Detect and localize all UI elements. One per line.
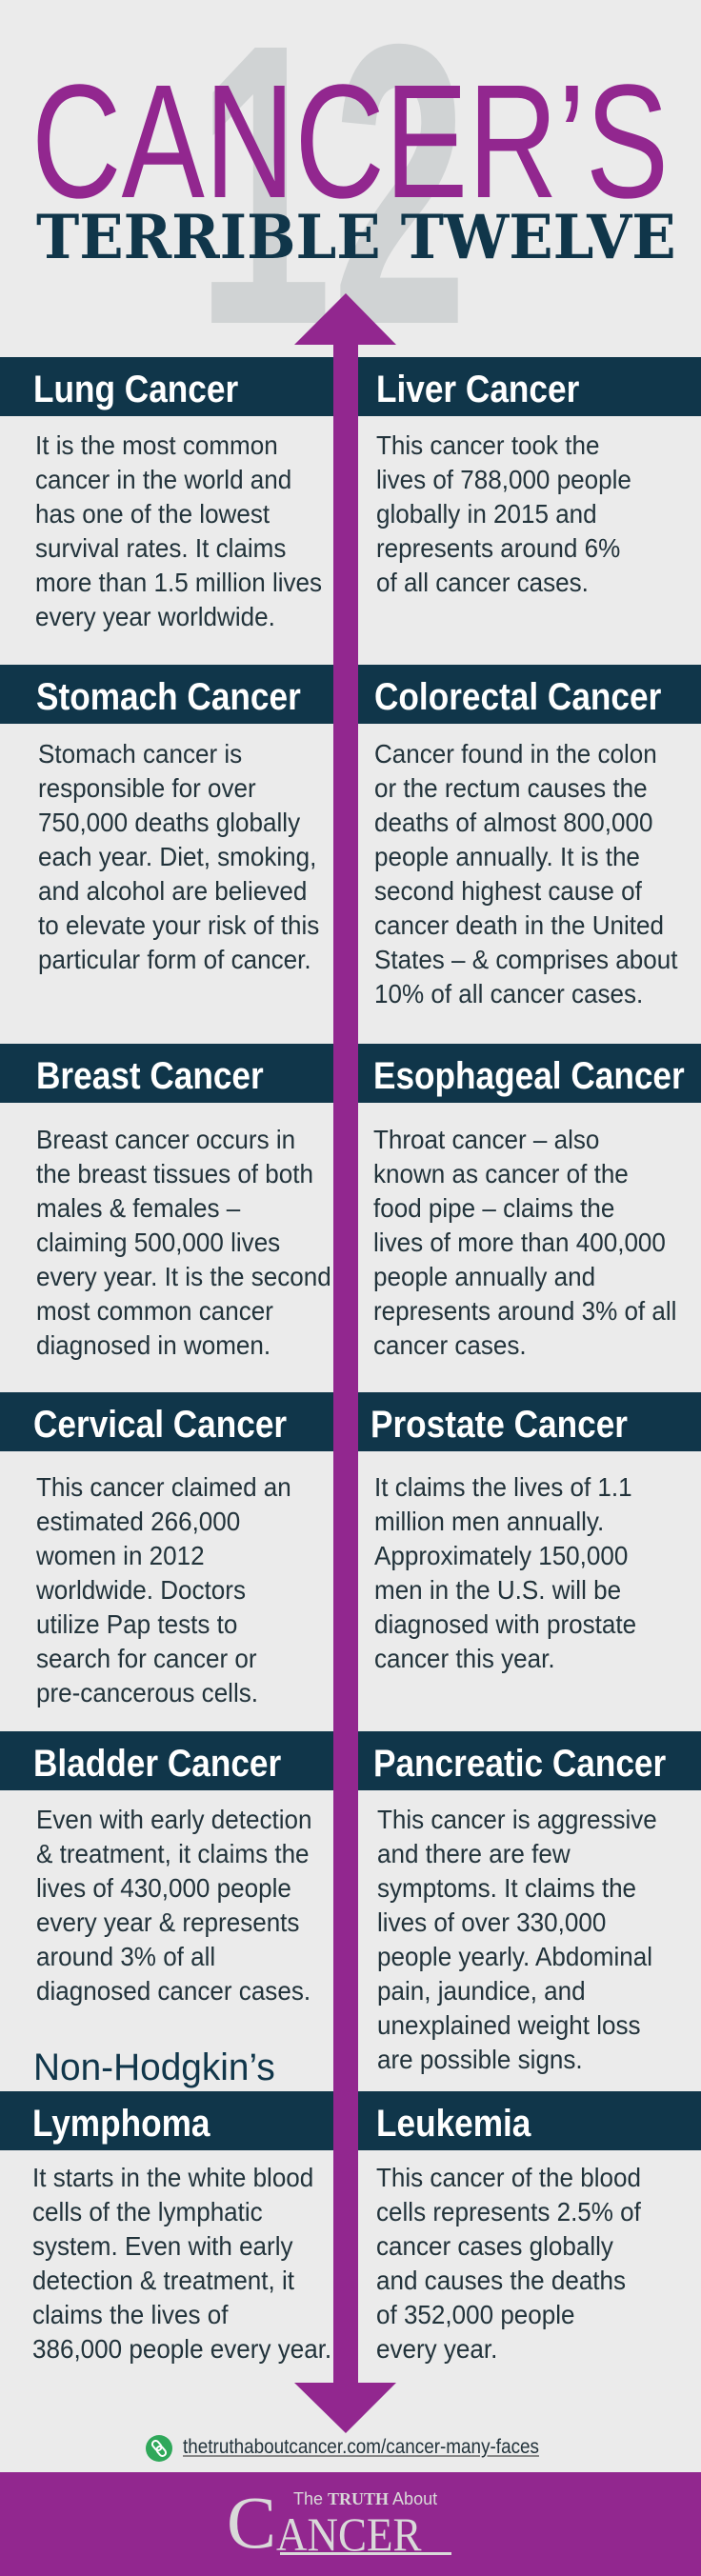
- text: breast cancer: the breast tissues of both: [36, 1159, 313, 1188]
- text: breast cancer: claiming 500,000 lives: [36, 1228, 280, 1257]
- text: lung cancer: every year worldwide.: [35, 602, 275, 631]
- text: esophageal cancer: cancer cases.: [373, 1330, 527, 1360]
- logo: The Truth About Cancer: C: [227, 2481, 276, 2564]
- text: stomach cancer: to elevate your risk of this: [38, 910, 319, 940]
- text: colorectal cancer: deaths of almost 800,000: [374, 808, 652, 837]
- text: breast cancer: males & females –: [36, 1193, 240, 1223]
- text: esophageal cancer: [373, 1125, 676, 1360]
- text: colorectal cancer: States – & comprises about: [374, 945, 677, 974]
- title: CANCER'S: CANCER’S: [31, 51, 669, 232]
- text: pancreatic cancer: unexplained weight loss: [377, 2010, 641, 2040]
- text: stomach cancer: and alcohol are believed: [38, 876, 307, 906]
- text: bladder cancer: around 3% of all: [36, 1942, 215, 1971]
- text: colorectal cancer: [374, 739, 678, 1008]
- text: prostate cancer: Approximately 150,000: [374, 1541, 628, 1570]
- text: bladder cancer: & treatment, it claims the: [36, 1839, 310, 1868]
- text: esophageal cancer: represents around 3% of all: [373, 1296, 676, 1326]
- text: pancreatic cancer: lives of over 330,000: [377, 1907, 606, 1937]
- text: leukemia: [376, 2163, 641, 2364]
- text: leukemia: every year.: [376, 2334, 497, 2364]
- heading: Esophageal Cancer: Esophageal Cancer: [373, 1055, 685, 1097]
- text: breast cancer: every year. It is the second: [36, 1262, 331, 1291]
- text: liver cancer: globally in 2015 and: [376, 499, 597, 529]
- text: esophageal cancer: known as cancer of the: [373, 1159, 629, 1188]
- text: colorectal cancer: second highest cause of: [374, 876, 642, 906]
- text: pancreatic cancer: people yearly. Abdominal: [377, 1942, 652, 1971]
- heading: Pancreatic Cancer: Pancreatic Cancer: [373, 1743, 666, 1785]
- text: prostate cancer: It claims the lives of 1.1: [374, 1472, 632, 1502]
- heading: Breast Cancer: Breast Cancer: [36, 1055, 264, 1097]
- heading: Lung Cancer: Lung Cancer: [33, 369, 238, 410]
- text: colorectal cancer: Cancer found in the colon: [374, 739, 657, 769]
- text: prostate cancer: men in the U.S. will be: [374, 1575, 621, 1605]
- text: prostate cancer: cancer this year.: [374, 1644, 555, 1673]
- text: lung cancer: more than 1.5 million lives: [35, 568, 322, 597]
- icon: link: [146, 2435, 172, 2462]
- text: esophageal cancer: lives of more than 400,000: [373, 1228, 666, 1257]
- text: breast cancer: most common cancer: [36, 1296, 273, 1326]
- text: esophageal cancer: Throat cancer – also: [373, 1125, 599, 1154]
- text: lymphoma: cells of the lymphatic: [32, 2197, 263, 2227]
- text: lung cancer: cancer in the world and: [35, 465, 291, 494]
- link text: thetruthaboutcancer.com/cancer-many-faces: [183, 2436, 539, 2458]
- text: bladder cancer: every year & represents: [36, 1907, 299, 1937]
- text: stomach cancer: particular form of cancer.: [38, 945, 311, 974]
- text: stomach cancer: responsible for over: [38, 773, 256, 803]
- logo: The Truth About Cancer: ANCER: [276, 2507, 422, 2561]
- text: leukemia: and causes the deaths: [376, 2266, 626, 2295]
- text: stomach cancer: [38, 739, 319, 974]
- text: cervical cancer: search for cancer or: [36, 1644, 257, 1673]
- text: liver cancer: This cancer took the: [376, 430, 599, 460]
- text: liver cancer: of all cancer cases.: [376, 568, 589, 597]
- text: pancreatic cancer: [377, 1805, 657, 2074]
- text: prostate cancer: million men annually.: [374, 1507, 604, 1536]
- text: prostate cancer: diagnosed with prostate: [374, 1609, 636, 1639]
- text: lymphoma: claims the lives of: [32, 2300, 229, 2329]
- text: lung cancer: survival rates. It claims: [35, 533, 286, 563]
- text: lymphoma: system. Even with early: [32, 2231, 293, 2261]
- text: leukemia: This cancer of the blood: [376, 2163, 641, 2192]
- text: liver cancer: lives of 788,000 people: [376, 465, 631, 494]
- text: colorectal cancer: cancer death in the United: [374, 910, 664, 940]
- text: esophageal cancer: people annually and: [373, 1262, 595, 1291]
- text: colorectal cancer: people annually. It is the: [374, 842, 640, 871]
- text: liver cancer: represents around 6%: [376, 533, 620, 563]
- text: lymphoma: detection & treatment, it: [32, 2266, 294, 2295]
- heading prefix: Non-Hodgkin's: Non-Hodgkin’s: [33, 2047, 275, 2088]
- heading: Cervical Cancer: Cervical Cancer: [33, 1404, 287, 1446]
- text: prostate cancer: [374, 1472, 636, 1673]
- text: stomach cancer: Stomach cancer is: [38, 739, 242, 769]
- text: cervical cancer: estimated 266,000: [36, 1507, 240, 1536]
- logo: The Truth About Cancer: [227, 2481, 451, 2564]
- heading: Stomach Cancer: Stomach Cancer: [36, 676, 301, 718]
- header band row 4: [0, 1392, 701, 1451]
- text: pancreatic cancer: pain, jaundice, and: [377, 1976, 586, 2006]
- text: lymphoma: 386,000 people every year.: [32, 2334, 331, 2364]
- text: pancreatic cancer: symptoms. It claims the: [377, 1873, 636, 1903]
- text: breast cancer: Breast cancer occurs in: [36, 1125, 295, 1154]
- text: stomach cancer: 750,000 deaths globally: [38, 808, 300, 837]
- text: pancreatic cancer: and there are few: [377, 1839, 571, 1868]
- text: lymphoma: It starts in the white blood: [32, 2163, 313, 2192]
- text: cervical cancer: [36, 1472, 291, 1707]
- heading: Lymphoma: Lymphoma: [32, 2103, 210, 2145]
- heading: Colorectal Cancer: Colorectal Cancer: [374, 676, 661, 718]
- text: breast cancer: [36, 1125, 331, 1360]
- text: cervical cancer: worldwide. Doctors: [36, 1575, 246, 1605]
- text: breast cancer: diagnosed in women.: [36, 1330, 270, 1360]
- text: leukemia: of 352,000 people: [376, 2300, 575, 2329]
- text: cervical cancer: pre-cancerous cells.: [36, 1678, 258, 1707]
- text: esophageal cancer: food pipe – claims the: [373, 1193, 614, 1223]
- text: pancreatic cancer: are possible signs.: [377, 2045, 583, 2074]
- text: cervical cancer: This cancer claimed an: [36, 1472, 291, 1502]
- header band row 5: [0, 1731, 701, 1790]
- text: leukemia: cancer cases globally: [376, 2231, 613, 2261]
- text: lymphoma: [32, 2163, 331, 2364]
- header band row 1: [0, 357, 701, 416]
- text: cervical cancer: utilize Pap tests to: [36, 1609, 237, 1639]
- heading: Prostate Cancer: Prostate Cancer: [371, 1404, 628, 1446]
- footer band: [0, 2472, 701, 2576]
- heading: Liver Cancer: Liver Cancer: [376, 369, 579, 410]
- text: bladder cancer: [36, 1805, 311, 2006]
- text: bladder cancer: diagnosed cancer cases.: [36, 1976, 310, 2006]
- text: lung cancer: [35, 430, 322, 631]
- header band row 3: [0, 1044, 701, 1103]
- subtitle: TERRIBLE TWELVE: TERRIBLE TWELVE: [36, 202, 676, 273]
- text: colorectal cancer: 10% of all cancer cases.: [374, 979, 643, 1008]
- text: lung cancer: has one of the lowest: [35, 499, 270, 529]
- link with icon: [146, 2435, 539, 2462]
- text: liver cancer: [376, 430, 631, 597]
- text: cervical cancer: women in 2012: [36, 1541, 205, 1570]
- heading: Bladder Cancer: Bladder Cancer: [33, 1743, 281, 1785]
- text: stomach cancer: each year. Diet, smoking,: [38, 842, 316, 871]
- text: leukemia: cells represents 2.5% of: [376, 2197, 641, 2227]
- text: pancreatic cancer: This cancer is aggressive: [377, 1805, 657, 1834]
- text: lung cancer: It is the most common: [35, 430, 278, 460]
- header band row 6: [0, 2091, 701, 2150]
- text: colorectal cancer: or the rectum causes the: [374, 773, 648, 803]
- text: bladder cancer: lives of 430,000 people: [36, 1873, 291, 1903]
- header band row 2: [0, 665, 701, 724]
- heading: Leukemia: Leukemia: [376, 2103, 531, 2145]
- text: bladder cancer: Even with early detection: [36, 1805, 311, 1834]
- logo: The Truth About Cancer: The TRUTH About: [293, 2489, 437, 2508]
